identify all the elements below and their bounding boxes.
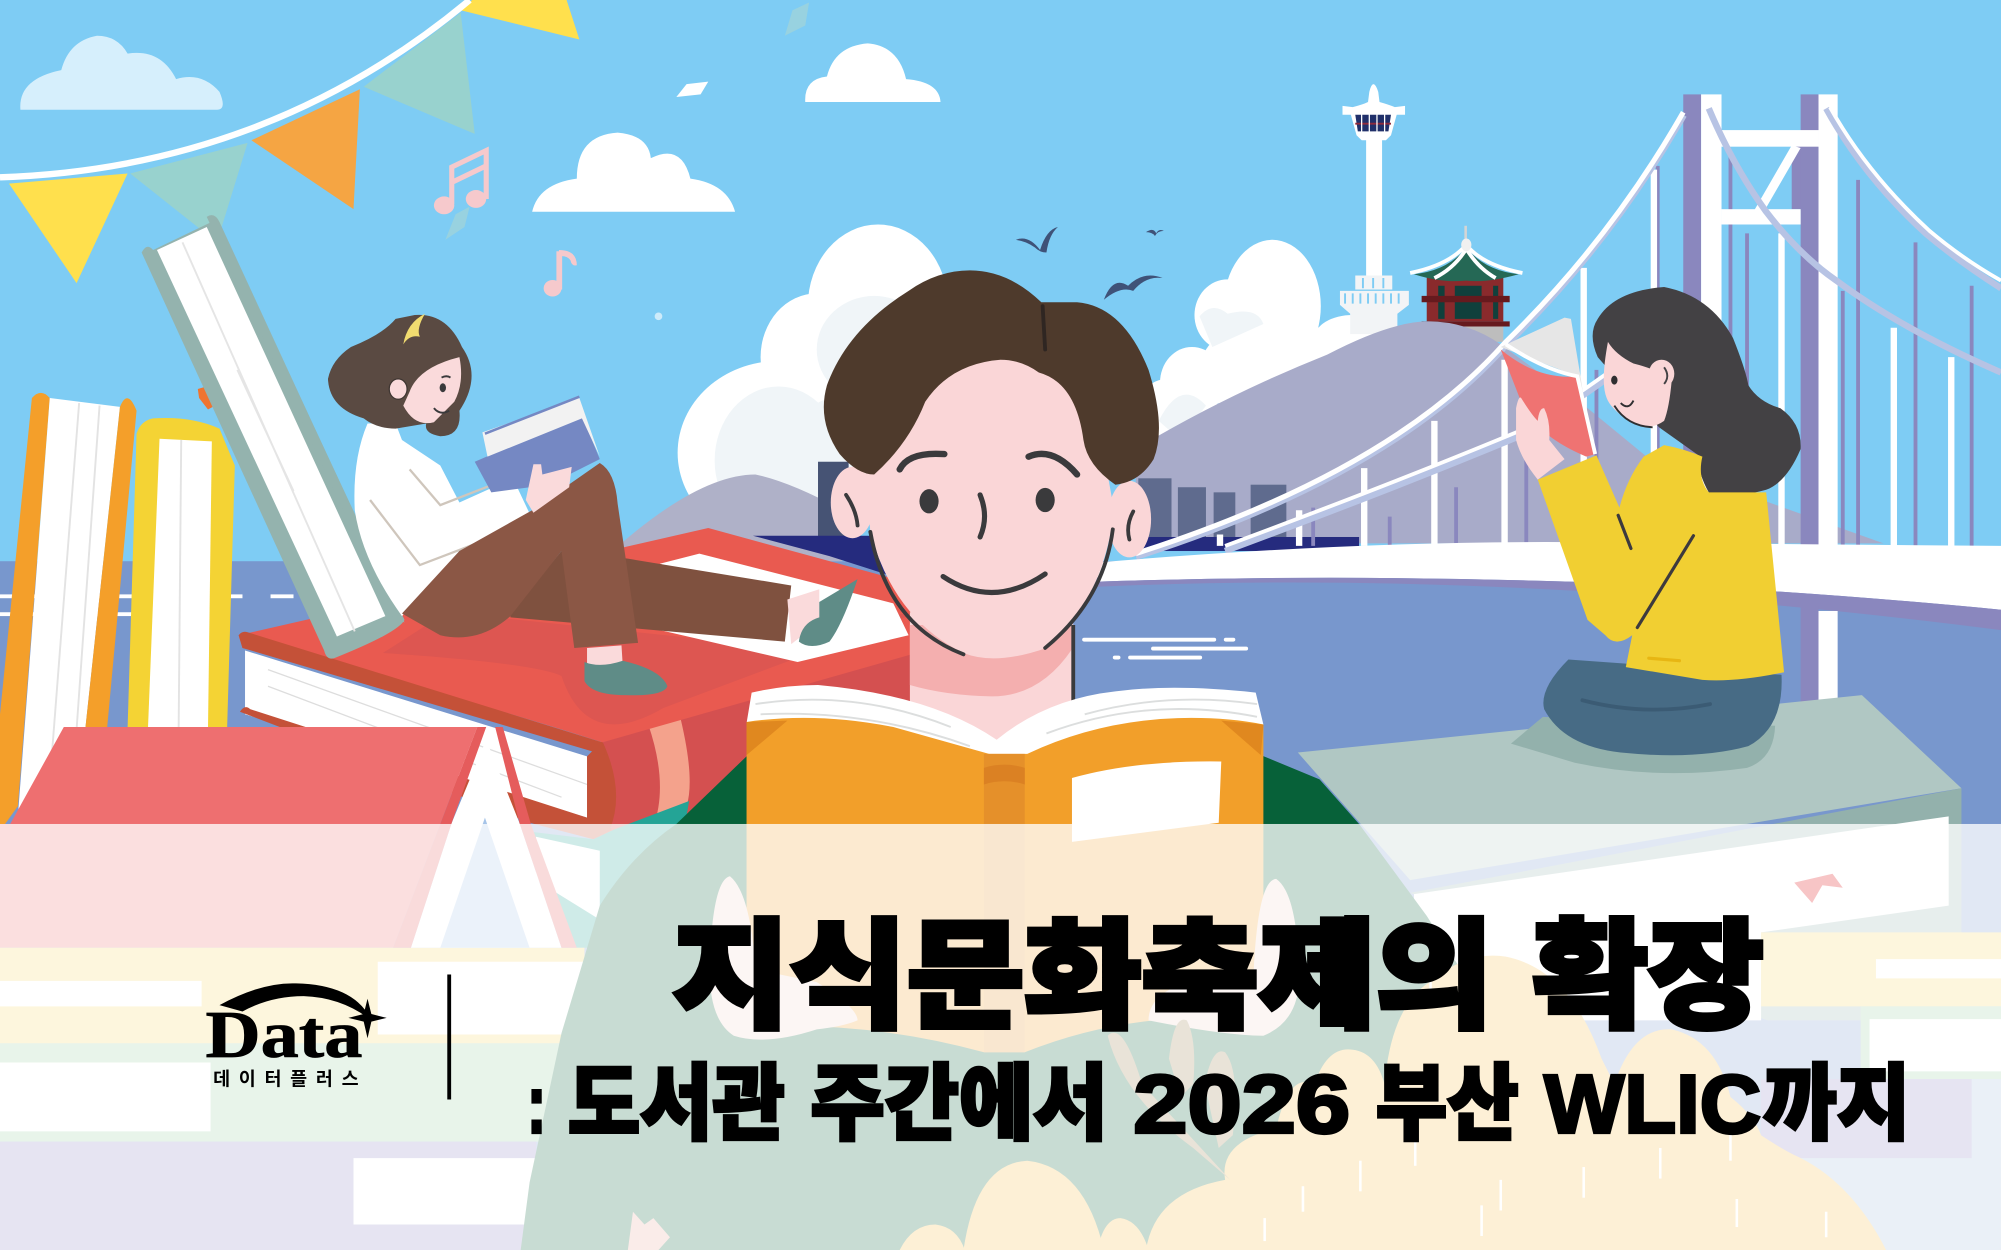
clouds	[20, 36, 1391, 545]
hand	[526, 464, 572, 513]
subtitle: WLIC	[1544, 1058, 1761, 1151]
skirt	[1543, 659, 1782, 755]
water lines	[0, 594, 1248, 659]
upper leg	[402, 463, 638, 648]
plant sprout	[628, 1212, 670, 1250]
torso	[354, 423, 533, 616]
tilted book	[142, 215, 405, 659]
city skyline	[753, 462, 1359, 577]
jawline	[870, 529, 1113, 654]
title: 지식문화축제의	[673, 912, 1493, 1044]
girl in white reading	[328, 314, 858, 695]
subtitle: 까지	[1764, 1058, 1910, 1151]
birds	[1016, 227, 1164, 300]
orange bookmark	[198, 385, 222, 409]
face	[865, 344, 1114, 658]
face	[1604, 342, 1672, 427]
orange open book	[747, 685, 1263, 1052]
lower foot	[584, 579, 858, 695]
eyebrows	[900, 454, 1077, 474]
mouth	[943, 574, 1045, 592]
subtitle: 2026	[1133, 1058, 1350, 1151]
sweater	[1538, 445, 1784, 680]
leaves over veil	[1108, 1020, 1235, 1180]
hair	[824, 270, 1159, 485]
subtitle: 주간에서	[810, 1058, 1108, 1151]
neck	[910, 612, 1073, 755]
open book tent	[393, 727, 577, 948]
ears	[831, 467, 874, 538]
logo swoosh	[219, 983, 371, 1020]
man reading	[824, 270, 1159, 755]
hair	[328, 315, 472, 436]
divider	[447, 974, 451, 1099]
face	[403, 357, 461, 423]
logo korean name: 데이터플러스	[213, 1068, 359, 1089]
bookmark	[1794, 874, 1843, 903]
music notes	[434, 3, 809, 320]
held book	[475, 397, 600, 492]
right book	[1298, 695, 1961, 1020]
bottom stacked books under veil	[0, 727, 2001, 1250]
mountains	[623, 321, 1884, 561]
hair	[1593, 287, 1801, 496]
hands holding book	[710, 876, 1299, 1040]
logo wordmark: Data	[205, 999, 362, 1072]
hairband	[403, 314, 425, 344]
white veil strip	[0, 824, 2001, 1250]
yellow bushes	[900, 956, 1886, 1250]
subtitle: 부산	[1376, 1058, 1519, 1151]
right girl reading	[1501, 287, 1801, 773]
subtitle: :	[527, 1058, 546, 1151]
red book	[239, 528, 970, 842]
bush speckles	[1263, 982, 1827, 1241]
book	[1501, 318, 1593, 454]
hand	[1516, 398, 1565, 480]
busan tower	[1340, 84, 1409, 334]
suspension bridge	[1097, 94, 2001, 702]
left upright books	[0, 393, 235, 824]
sweater	[521, 755, 1595, 1250]
bunting flags	[0, 0, 579, 283]
title: 확장	[1533, 912, 1764, 1044]
subtitle: 도서관	[568, 1058, 785, 1151]
pagoda	[1410, 226, 1522, 342]
eyes	[919, 489, 939, 513]
lower leg	[510, 551, 791, 642]
nose	[980, 495, 985, 537]
shadow	[1511, 717, 1775, 773]
logo star	[348, 999, 387, 1038]
logo: Data Plus	[205, 983, 387, 1089]
